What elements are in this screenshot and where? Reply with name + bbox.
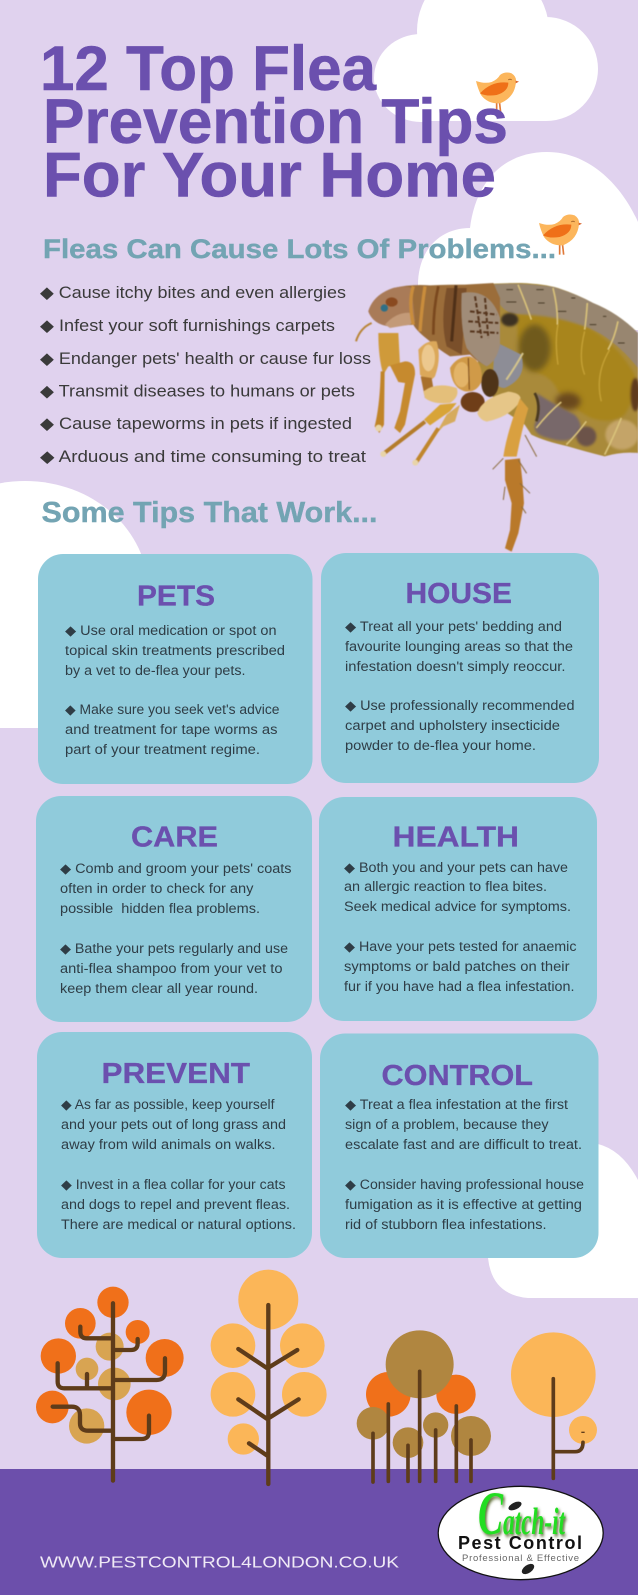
card: health xyxy=(319,797,597,1021)
flea head and thorax xyxy=(368,283,500,366)
card: care: ◆ Bathe your pets regularly and use xyxy=(60,941,288,956)
title xyxy=(40,34,508,210)
card: control: CONTROL xyxy=(382,1060,533,1092)
card: prevent: away from wild animals on walks. xyxy=(61,1137,276,1152)
card: prevent: and your pets out of long grass and xyxy=(61,1117,286,1132)
list: flea problems: ◆ Infest your soft furnishings carpets xyxy=(40,317,335,335)
card: care: possible hidden flea problems. xyxy=(60,901,260,916)
icon: bird on top cloud xyxy=(476,72,519,113)
card: prevent: ◆ As far as possible, keep yourself xyxy=(61,1097,275,1112)
heading: tips: Some Tips That Work... xyxy=(42,497,378,529)
card: control: ◆ Treat a flea infestation at the first xyxy=(345,1097,568,1112)
card: health: Seek medical advice for symptoms. xyxy=(344,899,571,914)
card: control: escalate fast and are difficult to treat. xyxy=(345,1137,582,1152)
card: control: sign of a problem, because they xyxy=(345,1117,549,1132)
cloud: left xyxy=(0,481,148,728)
card: health: an allergic reaction to flea bites. xyxy=(344,879,547,894)
card: care: keep them clear all year round. xyxy=(60,981,258,996)
card: pets: by a vet to de-flea your pets. xyxy=(65,663,246,678)
card: prevent xyxy=(37,1032,312,1258)
card: house: ◆ Treat all your pets' bedding and xyxy=(345,619,562,634)
logo: Catch-it Pest Control xyxy=(438,1480,603,1580)
card: care: often in order to check for any xyxy=(60,881,254,896)
list: flea problems: ◆ Cause tapeworms in pets if ingested xyxy=(40,415,352,433)
card: prevent: There are medical or natural options. xyxy=(61,1217,296,1232)
card: house: favourite lounging areas so that the xyxy=(345,639,573,654)
flea legs xyxy=(356,323,499,435)
flea abdomen xyxy=(478,283,638,456)
card: house xyxy=(321,553,599,783)
card: pets: part of your treatment regime. xyxy=(65,742,260,757)
card: care: ◆ Comb and groom your pets' coats xyxy=(60,861,292,876)
card: prevent: ◆ Invest in a flea collar for your cats xyxy=(61,1177,286,1192)
list: flea problems: ◆ Transmit diseases to humans or pets xyxy=(40,382,355,400)
list: flea problems xyxy=(40,284,371,466)
website url: WWW.PESTCONTROL4LONDON.CO.UK xyxy=(40,1554,399,1572)
card: care: CARE xyxy=(131,822,218,854)
cloud: top right xyxy=(374,0,598,122)
card: care: anti-flea shampoo from your vet to xyxy=(60,961,282,976)
logo: Catch-it Pest Control: Professional & Effective xyxy=(462,1553,579,1564)
card: house: HOUSE xyxy=(406,578,512,610)
list: flea problems: ◆ Cause itchy bites and even allergies xyxy=(40,284,346,302)
card: house: infestation doesn't simply reoccur. xyxy=(345,659,566,674)
ground band xyxy=(0,1469,638,1595)
tree: cluster of round trees xyxy=(357,1330,491,1482)
card: pets: PETS xyxy=(137,580,215,612)
cloud: right middle xyxy=(418,152,638,330)
card: health: HEALTH xyxy=(392,822,519,854)
card: control: rid of stubborn flea infestations. xyxy=(345,1217,546,1232)
card: control: ◆ Consider having professional house xyxy=(345,1177,584,1192)
card: house: ◆ Use professionally recommended xyxy=(345,698,574,713)
card: pets: and treatment for tape worms as xyxy=(65,722,278,737)
tree: orange branching xyxy=(36,1287,184,1481)
card: control xyxy=(320,1034,598,1258)
tree: single yellow xyxy=(511,1332,597,1478)
card: pets: ◆ Make sure you seek vet's advice xyxy=(65,702,280,717)
list: flea problems: ◆ Arduous and time consuming to treat xyxy=(40,448,366,466)
cloud: bottom right xyxy=(488,1144,638,1298)
list: flea problems: ◆ Endanger pets' health or cause fur loss xyxy=(40,350,371,368)
illustration: flea xyxy=(356,283,638,552)
heading: problems: Fleas Can Cause Lots Of Problems... xyxy=(43,234,556,264)
card: care xyxy=(36,796,312,1022)
logo: Catch-it Pest Control: Catch-it xyxy=(478,1480,566,1548)
card: pets xyxy=(38,554,312,784)
title: Prevention Tips xyxy=(43,87,508,157)
card: house: carpet and upholstery insecticide xyxy=(345,718,560,733)
card: health: ◆ Both you and your pets can have xyxy=(344,860,568,875)
card: prevent: and dogs to repel and prevent fleas. xyxy=(61,1197,290,1212)
card: pets: topical skin treatments prescribed xyxy=(65,643,285,658)
card: pets: ◆ Use oral medication or spot on xyxy=(65,623,276,638)
card: prevent: PREVENT xyxy=(102,1058,250,1090)
icon: bird on middle cloud xyxy=(539,214,582,255)
title: 12 Top Flea xyxy=(40,34,377,104)
card: health: fur if you have had a flea infestation. xyxy=(344,979,574,994)
tree: yellow with angled branches xyxy=(211,1270,327,1484)
flea lower legs xyxy=(380,392,537,552)
card: health: symptoms or bald patches on their xyxy=(344,959,570,974)
card: control: fumigation as it is effective at getting xyxy=(345,1197,582,1212)
card: house: powder to de-flea your home. xyxy=(345,738,536,753)
card: health: ◆ Have your pets tested for anaemic xyxy=(344,939,577,954)
title: For Your Home xyxy=(43,140,496,210)
logo: Catch-it Pest Control: Pest Control xyxy=(458,1533,582,1553)
